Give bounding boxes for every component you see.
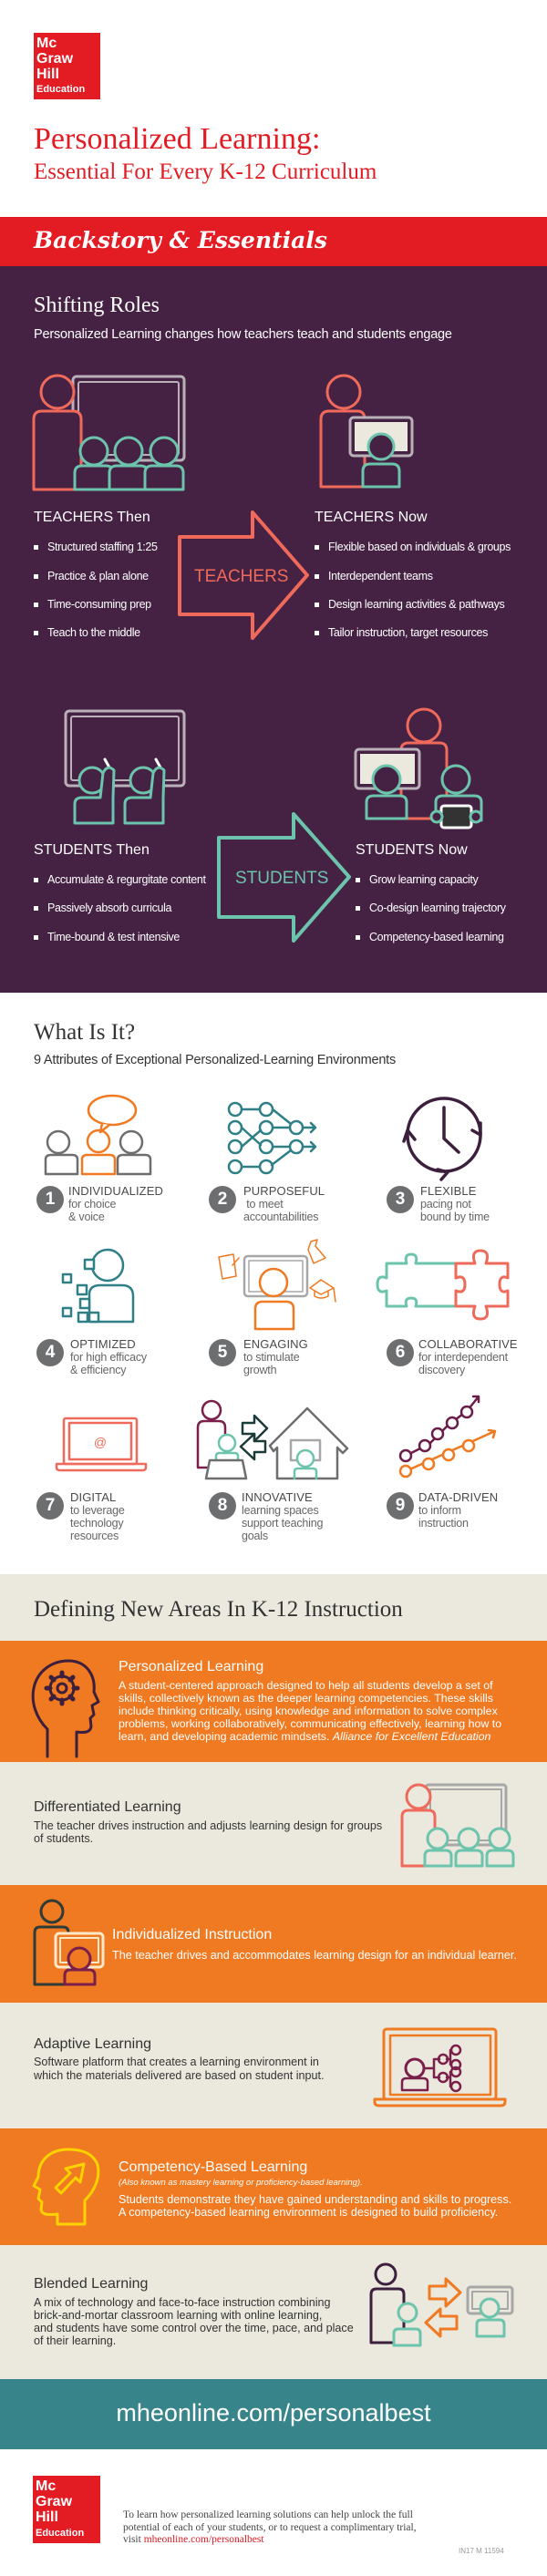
text block: teachers now: Flexible based on individuals & groups (328, 541, 511, 553)
text block: teachers now: TEACHERS Now (315, 510, 428, 525)
text block: differentiated learning: The teacher drives instruction and adjusts learning design for groups (34, 1819, 382, 1832)
text: accountabilities (243, 1211, 318, 1223)
text: goals (242, 1530, 268, 1542)
text: 2 (218, 1190, 227, 1209)
attribute labels: 1 (46, 1190, 55, 1209)
icon: students then (66, 711, 184, 823)
background: teal url band (0, 2379, 547, 2449)
text block: competency-based learning (119, 2159, 511, 2219)
text: for interdependent (418, 1351, 508, 1364)
text: 8 (218, 1496, 227, 1515)
background: orange band personalized (0, 1641, 547, 1762)
text block: adaptive learning (34, 2036, 325, 2082)
text block: students now: STUDENTS Now (356, 842, 468, 858)
icon: individualized (46, 1096, 150, 1174)
background: defining header beige (0, 1574, 547, 1641)
icon: differentiated classroom (402, 1785, 513, 1866)
text: 6 (396, 1343, 405, 1362)
text block: individualized instruction: The teacher drives and accommodates learning design for an individual learner. (112, 1949, 517, 1962)
text block: competency-based learning: (Also known as mastery learning or proficiency-based learning). (119, 2178, 363, 2188)
text: INNOVATIVE (242, 1490, 313, 1504)
text: 9 (396, 1496, 405, 1515)
text: & efficiency (70, 1364, 126, 1376)
icon: flexible clock (404, 1098, 480, 1180)
text: instruction (418, 1517, 469, 1530)
logo top: Hill (36, 67, 59, 82)
text block: individualized instruction (112, 1927, 517, 1962)
icon: digital laptop: @ (94, 1435, 107, 1449)
footer code: IN17 M 11594 (459, 2547, 504, 2555)
text: OPTIMIZED (70, 1337, 136, 1351)
text: FLEXIBLE (420, 1184, 476, 1198)
logo footer: Graw (36, 2494, 72, 2509)
text: 3 (396, 1190, 405, 1209)
text block: personalized learning: A student-centered approach designed to help all students develop a set of (119, 1679, 493, 1692)
icon: teachers now (321, 376, 412, 487)
text: growth (243, 1364, 276, 1376)
arrow: students (219, 814, 349, 941)
text block: differentiated learning (34, 1799, 382, 1845)
text block: teachers then (34, 510, 158, 639)
icon: engaging (219, 1240, 335, 1329)
text block: teachers now (315, 510, 511, 639)
text: to stimulate (243, 1351, 300, 1364)
text: discovery (418, 1364, 465, 1376)
text block: students then (34, 842, 206, 943)
text: to meet (246, 1198, 284, 1211)
text block: blended learning: brick-and-mortar classroom learning with online learning, (34, 2309, 322, 2322)
text: PURPOSEFUL (243, 1184, 325, 1198)
heading: what is it: What Is It? (34, 1020, 135, 1045)
text block: individualized instruction: Individualized Instruction (112, 1927, 272, 1942)
arrow: teachers (180, 512, 307, 638)
text: what is it subtitle: 9 Attributes of Exceptional Personalized-Learning Environments (34, 1053, 396, 1067)
text: INDIVIDUALIZED (68, 1184, 163, 1198)
icon: data-driven chart (400, 1396, 495, 1477)
icon: purposeful network (229, 1103, 315, 1173)
text block: students now: Competency-based learning (369, 931, 504, 943)
icon: adaptive laptop (375, 2029, 505, 2106)
text block: teachers then: Teach to the middle (47, 626, 140, 639)
text block: blended learning: Blended Learning (34, 2276, 148, 2292)
text block: blended learning: and students have some control over the time, pace, and place (34, 2322, 354, 2334)
text block: competency-based learning: Students demonstrate they have gained understanding and skills to progress. (119, 2193, 511, 2206)
text block: students now (356, 842, 506, 943)
text block: teachers now: Design learning activities & pathways (328, 598, 504, 611)
text block: adaptive learning: Adaptive Learning (34, 2036, 151, 2052)
text block: blended learning (34, 2276, 354, 2347)
icon: innovative spaces (198, 1401, 347, 1479)
background: purple section (0, 266, 547, 993)
text: 7 (46, 1496, 55, 1515)
icon: optimized (63, 1250, 133, 1322)
footer text: visit mheonline.com/personalbest (123, 2534, 264, 2545)
logo top: Graw (36, 51, 73, 67)
text: & voice (68, 1211, 105, 1223)
text block: students then: Time-bound & test intensive (47, 931, 180, 943)
attribute labels (36, 1186, 64, 1213)
text block: personalized learning (119, 1659, 501, 1743)
text: for high efficacy (70, 1351, 147, 1364)
icon: competency head (34, 2149, 98, 2224)
icon: digital laptop (57, 1418, 146, 1470)
text: support teaching (242, 1517, 323, 1530)
heading: defining new areas: Defining New Areas In K-12 Instruction (34, 1597, 403, 1622)
text block: differentiated learning: Differentiated Learning (34, 1799, 181, 1815)
text: resources (70, 1530, 119, 1542)
logo top (34, 33, 100, 99)
icon: head with gear (33, 1661, 98, 1757)
footer text (123, 2509, 417, 2545)
footer text: potential of each of your students, or to request a complimentary trial, (123, 2521, 417, 2532)
banner heading: Backstory & Essentials (34, 227, 327, 253)
text: to inform (418, 1504, 461, 1517)
text block: blended learning: A mix of technology and face-to-face instruction combining (34, 2296, 331, 2309)
background: red banner (0, 217, 547, 266)
subtitle: Essential For Every K-12 Curriculum (34, 160, 377, 184)
background: beige differentiated (0, 1762, 547, 1885)
text block: students now: Co-design learning trajectory (369, 902, 506, 914)
background: beige adaptive (0, 2003, 547, 2128)
arrow: students: STUDENTS (235, 869, 328, 888)
logo top: Mc (36, 36, 57, 51)
text block: teachers now: Interdependent teams (328, 570, 433, 582)
text: 5 (218, 1343, 227, 1362)
text block: competency-based learning: A competency-based learning environment is designed to build proficiency. (119, 2206, 498, 2219)
text: ENGAGING (243, 1337, 308, 1351)
text block: personalized learning: learn, and developing academic mindsets. Alliance for Excellent Education (119, 1730, 490, 1743)
text block: blended learning: of their learning. (34, 2334, 116, 2347)
icon: collaborative puzzle (377, 1251, 508, 1319)
text block: teachers now: Tailor instruction, target resources (328, 626, 488, 639)
text block: adaptive learning: which the materials delivered are based on student input. (34, 2069, 325, 2082)
icon: individualized instruction (35, 1901, 103, 1984)
logo footer: Mc (36, 2478, 56, 2494)
text block: teachers then: TEACHERS Then (34, 510, 150, 525)
footer text: To learn how personalized learning solutions can help unlock the full (123, 2509, 413, 2520)
text: for choice (68, 1198, 116, 1211)
text block: competency-based learning: Competency-Based Learning (119, 2159, 307, 2175)
text: shifting roles subtitle: Personalized Learning changes how teachers teach and students engage (34, 327, 452, 342)
text block: personalized learning: Personalized Learning (119, 1659, 263, 1674)
text: to leverage (70, 1504, 125, 1517)
text block: adaptive learning: Software platform that creates a learning environment in (34, 2056, 319, 2068)
text: DATA-DRIVEN (418, 1490, 498, 1504)
icon: teachers then classroom (34, 376, 184, 489)
icon: blended learning (371, 2264, 512, 2345)
text: learning spaces (242, 1504, 319, 1517)
text block: students then: Accumulate & regurgitate content (47, 873, 206, 886)
text block: students then: STUDENTS Then (34, 842, 150, 858)
arrow: teachers: TEACHERS (194, 567, 288, 586)
text block: personalized learning: skills, collectively known as the deeper learning competencies. These skills (119, 1692, 493, 1705)
text block: teachers then: Time-consuming prep (47, 598, 151, 611)
text: 4 (46, 1343, 55, 1362)
background: orange competency (0, 2128, 547, 2245)
text block: teachers then: Practice & plan alone (47, 570, 149, 582)
text: bound by time (420, 1211, 490, 1223)
logo top: Education (36, 84, 85, 95)
text block: personalized learning: problems, working collaboratively, communicating effectively, learning how to (119, 1717, 501, 1730)
icon: students now (356, 709, 481, 828)
logo footer: Education (36, 2528, 84, 2539)
text block: students now: Grow learning capacity (369, 873, 478, 886)
text block: personalized learning: include thinking critically, using knowledge and information to solve complex (119, 1705, 498, 1717)
heading: shifting roles: Shifting Roles (34, 294, 160, 317)
background: beige blended (0, 2245, 547, 2379)
text: pacing not (420, 1198, 471, 1211)
text: DIGITAL (70, 1490, 116, 1504)
text block: teachers then: Structured staffing 1:25 (47, 541, 158, 553)
background: orange individualized (0, 1885, 547, 2003)
text block: students then: Passively absorb curricula (47, 902, 171, 914)
title: Personalized Learning: (34, 122, 320, 156)
text: technology (70, 1517, 123, 1530)
url band text: mheonline.com/personalbest (116, 2399, 431, 2427)
logo footer (33, 2476, 100, 2543)
text: COLLABORATIVE (418, 1337, 518, 1351)
logo footer: Hill (36, 2509, 58, 2525)
text block: differentiated learning: of students. (34, 1832, 93, 1845)
